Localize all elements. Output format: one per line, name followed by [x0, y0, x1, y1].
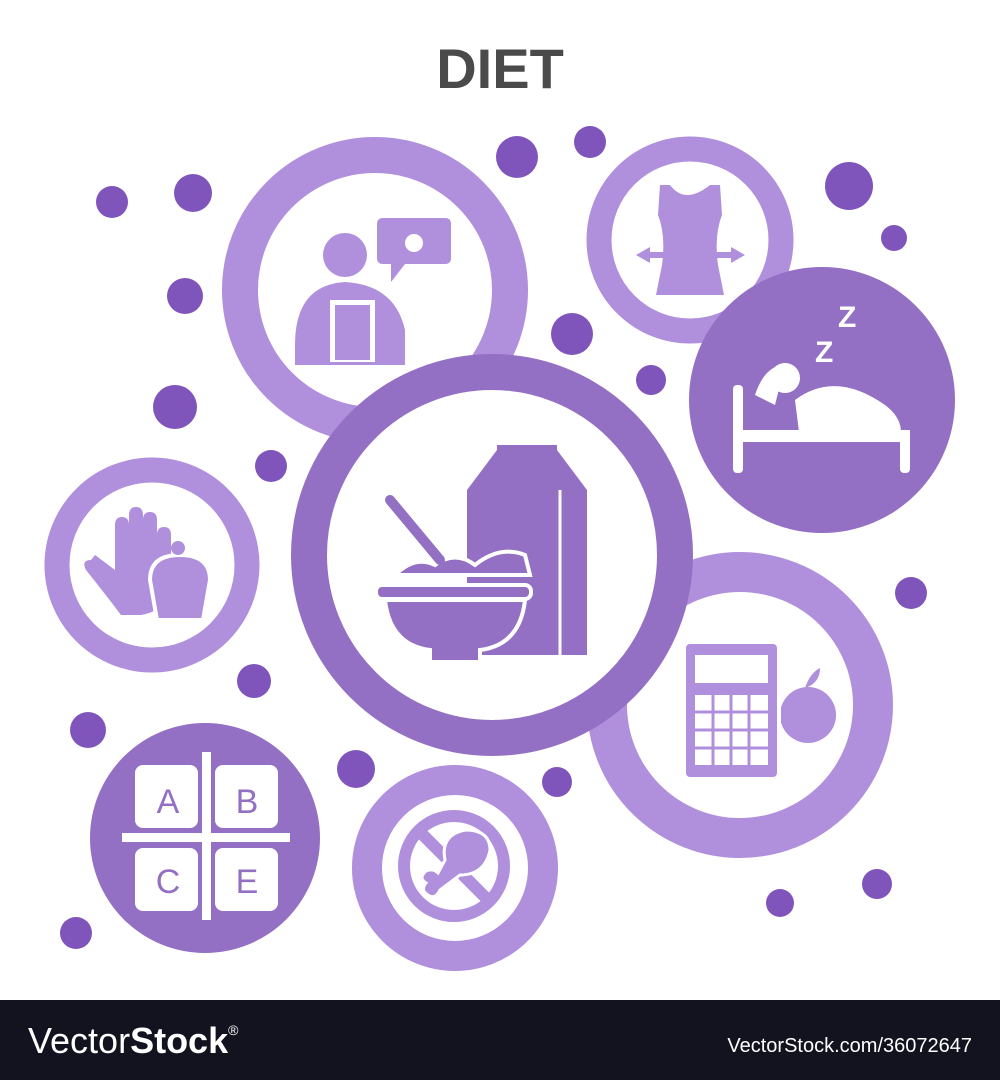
panel: consultant — [240, 155, 510, 425]
logo: ® — [228, 1022, 239, 1038]
icon: ABC blocks: C — [156, 863, 180, 901]
panel: ABC — [90, 723, 320, 953]
icon: calculator — [684, 642, 836, 779]
icon: sleeping person: Z — [815, 336, 833, 369]
icon: ABC blocks — [122, 752, 290, 920]
url: VectorStock.com/36072647 — [727, 1035, 972, 1057]
title: DIET — [436, 37, 564, 100]
decorative dots — [60, 126, 927, 949]
icon: cereal bowl and milk carton — [376, 445, 587, 662]
logo: VectorStock — [28, 1020, 228, 1061]
icon: waist — [636, 185, 745, 295]
panel: sleep — [689, 267, 955, 533]
panel: no meat — [367, 780, 543, 956]
panel: hand and cupcake — [57, 470, 247, 660]
icon: ABC blocks: B — [236, 783, 258, 821]
icon: hand refusing cupcake — [84, 507, 210, 620]
footer bar — [0, 1000, 1000, 1080]
panel: calculator and apple — [607, 572, 873, 838]
panel: breakfast (center) — [309, 372, 675, 738]
icon: consultant with speech bubble — [295, 218, 451, 365]
icon: sleeping person — [733, 301, 910, 473]
icon: sleeping person: Z — [838, 301, 856, 334]
icon: ABC blocks: E — [236, 863, 258, 901]
icon: no meat — [404, 816, 504, 916]
icon: ABC blocks: A — [157, 783, 180, 821]
panel: body shape — [599, 149, 781, 331]
